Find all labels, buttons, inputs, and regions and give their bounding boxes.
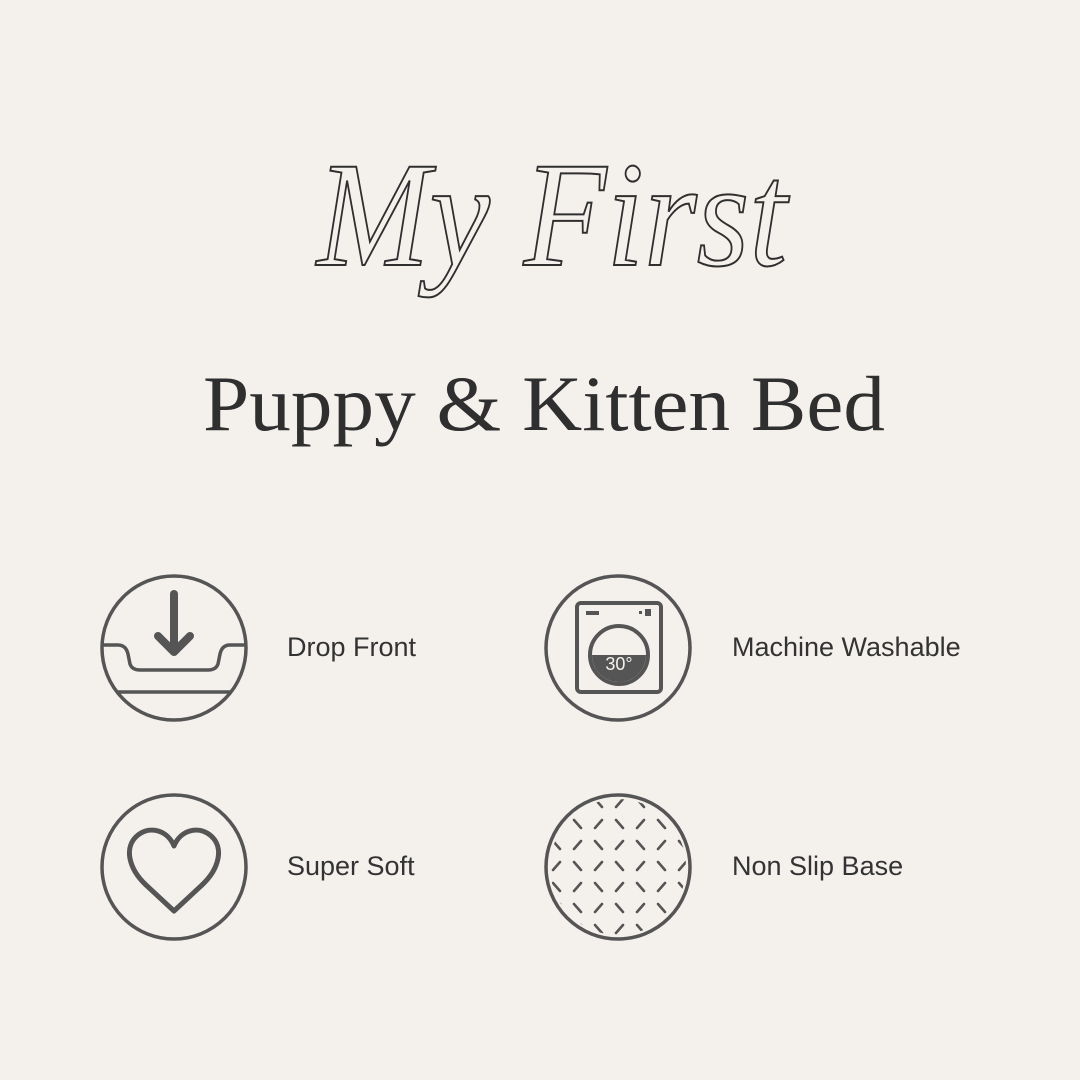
icon: machine washable: 30° [605,654,633,674]
icon: non slip base [544,793,692,941]
label: Drop Front: Drop Front [287,632,416,662]
feature grid [100,574,961,941]
label: Super Soft: Super Soft [287,851,415,881]
title: My First: My First [315,132,790,298]
label: Machine Washable: Machine Washable [732,632,961,662]
label: Non Slip Base: Non Slip Base [732,851,903,881]
subtitle: Puppy & Kitten Bed: Puppy & Kitten Bed [203,360,885,447]
icon: drop front [100,574,248,722]
icon: machine washable [544,574,692,722]
icon: super soft heart [100,793,248,941]
